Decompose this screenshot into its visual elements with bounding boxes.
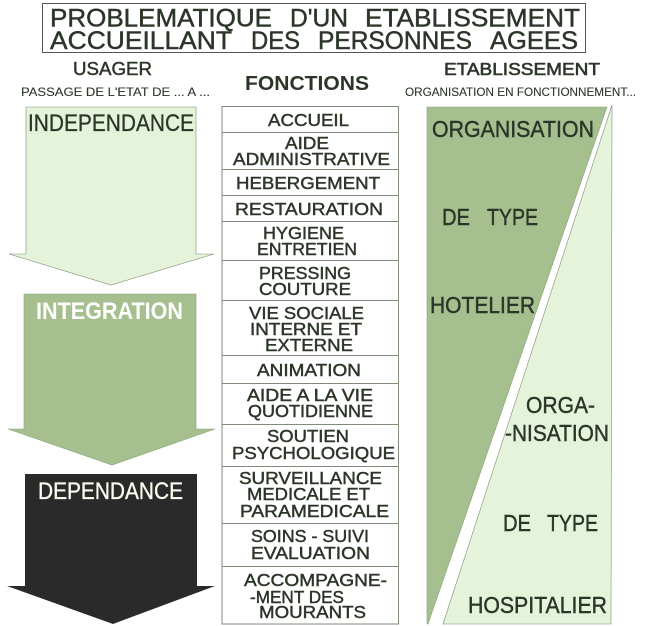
arrow: integration: INTEGRATION <box>36 298 183 325</box>
function: accompagnement: MOURANTS <box>259 602 366 622</box>
panel: organisation hoteliere <box>427 107 607 624</box>
function: accueil: ACCUEIL <box>268 110 349 130</box>
title <box>42 4 586 55</box>
function: aide a la vie quotidienne <box>247 385 373 421</box>
function: soutien psychologique <box>232 426 395 463</box>
function: hygiene entretien: HYGIENE <box>263 223 344 243</box>
function: accompagnement: -MENT DES <box>250 587 344 607</box>
heading: usager <box>21 59 210 99</box>
title: D'UN <box>290 4 348 32</box>
panel: organisation hospitaliere: -NISATION <box>505 420 609 446</box>
title: AGEES <box>490 27 578 55</box>
arrow: integration <box>8 294 215 465</box>
heading: usager: PASSAGE DE L'ETAT DE ... A ... <box>21 87 210 99</box>
function: surveillance: MEDICALE ET <box>247 484 370 504</box>
function: aide administrative: ADMINISTRATIVE <box>233 149 390 169</box>
heading: usager: USAGER <box>73 59 152 79</box>
function: pressing couture: PRESSING <box>259 263 351 283</box>
function: aide administrative <box>233 133 390 169</box>
panel: organisation hospitaliere: DE <box>503 510 531 536</box>
function: animation: ANIMATION <box>257 360 361 380</box>
function: surveillance <box>239 468 389 521</box>
function: soins <box>251 526 370 563</box>
heading: fonctions: FONCTIONS <box>245 73 369 95</box>
arrow: dependance: DEPENDANCE <box>38 478 183 505</box>
function: restauration: RESTAURATION <box>235 199 383 219</box>
panel: organisation hoteliere: TYPE <box>487 204 538 230</box>
heading: etablissement: ETABLISSEMENT <box>444 59 600 79</box>
function: aide a la vie quotidienne: AIDE A LA VIE <box>247 385 373 405</box>
function: pressing couture: COUTURE <box>259 279 351 299</box>
heading: etablissement <box>405 59 636 99</box>
function: soutien psychologique: SOUTIEN <box>267 426 349 446</box>
function: surveillance: PARAMEDICALE <box>240 501 389 521</box>
function: surveillance: SURVEILLANCE <box>239 468 382 488</box>
function: soins: SOINS - SUIVI <box>251 526 369 546</box>
function: vie sociale: EXTERNE <box>265 335 353 355</box>
panel: organisation hospitaliere: TYPE <box>547 510 598 536</box>
panel: organisation hoteliere: ORGANISATION <box>432 116 594 142</box>
panel: organisation hospitaliere: ORGA- <box>526 392 595 418</box>
function: hebergement: HEBERGEMENT <box>236 173 380 193</box>
function: vie sociale: INTERNE ET <box>250 319 362 339</box>
title: DES <box>251 27 300 55</box>
heading: etablissement: ORGANISATION EN FONCTIONNEMENT... <box>405 87 636 99</box>
function: accompagnement: ACCOMPAGNE- <box>244 570 387 590</box>
function: aide administrative: AIDE <box>285 133 329 153</box>
function: soins: EVALUATION <box>251 543 370 563</box>
function: hygiene entretien: ENTRETIEN <box>257 239 357 259</box>
function: vie sociale <box>249 303 364 355</box>
title: ACCUEILLANT <box>50 27 232 55</box>
arrow: dependance <box>7 474 215 624</box>
panel: organisation hoteliere: HOTELIER <box>430 292 535 318</box>
function: pressing couture <box>259 263 351 299</box>
function: accompagnement <box>244 570 387 622</box>
arrow: independance <box>9 107 214 285</box>
panel: organisation hospitaliere: HOSPITALIER <box>468 592 607 618</box>
function: hygiene entretien <box>257 223 357 259</box>
function: vie sociale: VIE SOCIALE <box>249 303 364 323</box>
panel: organisation hospitaliere <box>443 105 612 624</box>
title: PERSONNES <box>318 27 472 55</box>
arrow: independance: INDEPENDANCE <box>28 110 194 137</box>
title: ETABLISSEMENT <box>365 4 580 32</box>
function: soutien psychologique: PSYCHOLOGIQUE <box>232 443 395 463</box>
panel: fonctions table <box>222 106 398 624</box>
function: aide a la vie quotidienne: QUOTIDIENNE <box>248 401 373 421</box>
title: PROBLEMATIQUE <box>50 4 272 32</box>
panel: organisation hoteliere: DE <box>442 204 470 230</box>
